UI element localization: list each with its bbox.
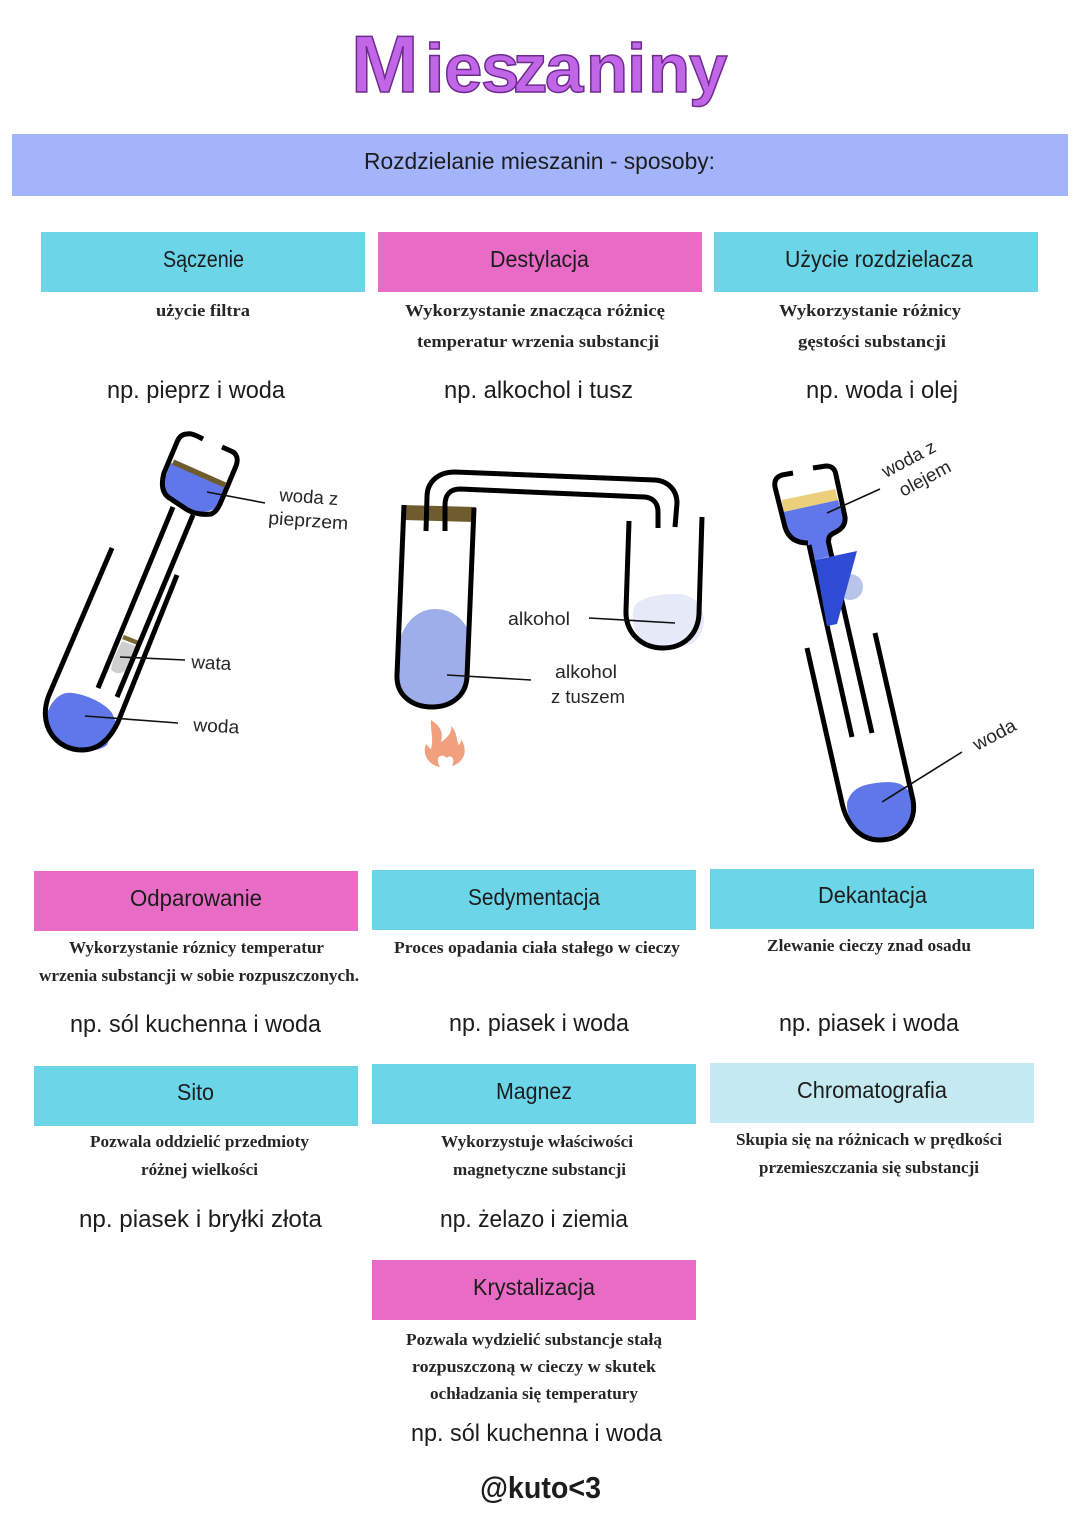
panel: Sito: np. piasek i bryłki złota	[79, 1206, 323, 1233]
panel: Krystalizacja	[372, 1260, 696, 1447]
panel: Dekantacja: np. piasek i woda	[779, 1010, 960, 1037]
diagram: distillation	[397, 472, 704, 767]
panel: Destylacja: Wykorzystanie znacząca różnicę	[405, 301, 665, 320]
panel: Destylacja: temperatur wrzenia substancji	[417, 332, 659, 351]
panel: Destylacja: Destylacja	[490, 246, 590, 272]
panel: Krystalizacja: Pozwala wydzielić substancje stałą	[406, 1330, 662, 1349]
panel: Dekantacja: Dekantacja	[818, 882, 928, 908]
panel: Krystalizacja: Krystalizacja	[473, 1274, 596, 1300]
signature: @kuto<3	[480, 1470, 601, 1505]
diagram: separating funnel	[775, 436, 1020, 840]
diagram: separating funnel: olejem	[895, 456, 954, 501]
diagram: distillation: alkohol	[508, 608, 570, 629]
panel: Magnez: np. żelazo i ziemia	[440, 1206, 629, 1233]
panel: Odparowanie: Odparowanie	[130, 885, 262, 911]
title: ieszaniny	[425, 30, 727, 107]
panel: Dekantacja: Zlewanie cieczy znad osadu	[767, 936, 971, 955]
panel: Dekantacja	[710, 869, 1034, 1037]
panel: Magnez: magnetyczne substancji	[453, 1160, 626, 1179]
panel: Sito	[34, 1066, 358, 1233]
diagram: filtration: wata	[190, 651, 233, 674]
banner: methods heading	[12, 134, 1068, 196]
panel: Sączenie: Sączenie	[163, 246, 244, 272]
diagram: filtration: pieprzem	[268, 507, 349, 534]
panel: Sączenie: użycie filtra	[156, 301, 250, 320]
panel: Magnez: Magnez	[496, 1078, 572, 1104]
panel: Odparowanie: wrzenia substancji w sobie rozpuszczonych.	[39, 966, 359, 985]
panel: Odparowanie: np. sól kuchenna i woda	[70, 1011, 322, 1038]
panel: Chromatografia	[710, 1063, 1034, 1177]
panel: Chromatografia: przemieszczania się substancji	[759, 1158, 979, 1177]
panel: Krystalizacja: ochładzania się temperatury	[430, 1384, 639, 1403]
panel: Sączenie: np. pieprz i woda	[107, 377, 286, 404]
panel: Sito: Pozwala oddzielić przedmioty	[90, 1132, 310, 1151]
diagram: distillation: alkohol	[555, 661, 617, 682]
title: M	[351, 20, 418, 110]
panel: Użycie rozdzielacza: np. woda i olej	[806, 377, 958, 404]
diagram: filtration: woda z	[278, 484, 339, 509]
panel: Sedymentacja: Proces opadania ciała stałego w cieczy	[394, 938, 681, 957]
diagram: distillation: z tuszem	[551, 686, 625, 707]
banner: methods heading: Rozdzielanie mieszanin - sposoby:	[364, 148, 715, 174]
panel: Sedymentacja: Sedymentacja	[468, 884, 601, 910]
panel: Krystalizacja: rozpuszczoną w cieczy w skutek	[412, 1357, 657, 1376]
icon: flame	[425, 720, 465, 767]
panel: Sedymentacja	[372, 870, 696, 1037]
panel: Chromatografia: Skupia się na różnicach w prędkości	[736, 1130, 1002, 1149]
panel: Odparowanie	[34, 871, 359, 1038]
panel: Magnez: Wykorzystuje właściwości	[441, 1132, 633, 1151]
panel: Użycie rozdzielacza: Użycie rozdzielacza	[785, 246, 974, 272]
diagram: filtration: woda	[192, 714, 241, 737]
panel: Chromatografia: Chromatografia	[797, 1077, 948, 1103]
panel: Użycie rozdzielacza: Wykorzystanie różnicy	[779, 301, 962, 320]
panel: Sedymentacja: np. piasek i woda	[449, 1010, 630, 1037]
diagram: separating funnel: woda	[968, 714, 1020, 755]
panel: Użycie rozdzielacza	[714, 232, 1038, 404]
panel: Krystalizacja: np. sól kuchenna i woda	[411, 1420, 663, 1447]
panel: Sito: różnej wielkości	[141, 1160, 258, 1179]
diagram: filtration	[45, 434, 349, 751]
panel: Destylacja	[378, 232, 702, 404]
panel: Użycie rozdzielacza: gęstości substancji	[798, 332, 946, 351]
panel: Destylacja: np. alkochol i tusz	[444, 377, 633, 404]
panel: Odparowanie: Wykorzystanie róznicy temperatur	[69, 938, 324, 957]
panel: Magnez	[372, 1064, 696, 1233]
diagram: separating funnel: woda z	[877, 436, 939, 482]
panel: Sito: Sito	[177, 1079, 214, 1105]
panel: Sączenie	[41, 232, 365, 404]
